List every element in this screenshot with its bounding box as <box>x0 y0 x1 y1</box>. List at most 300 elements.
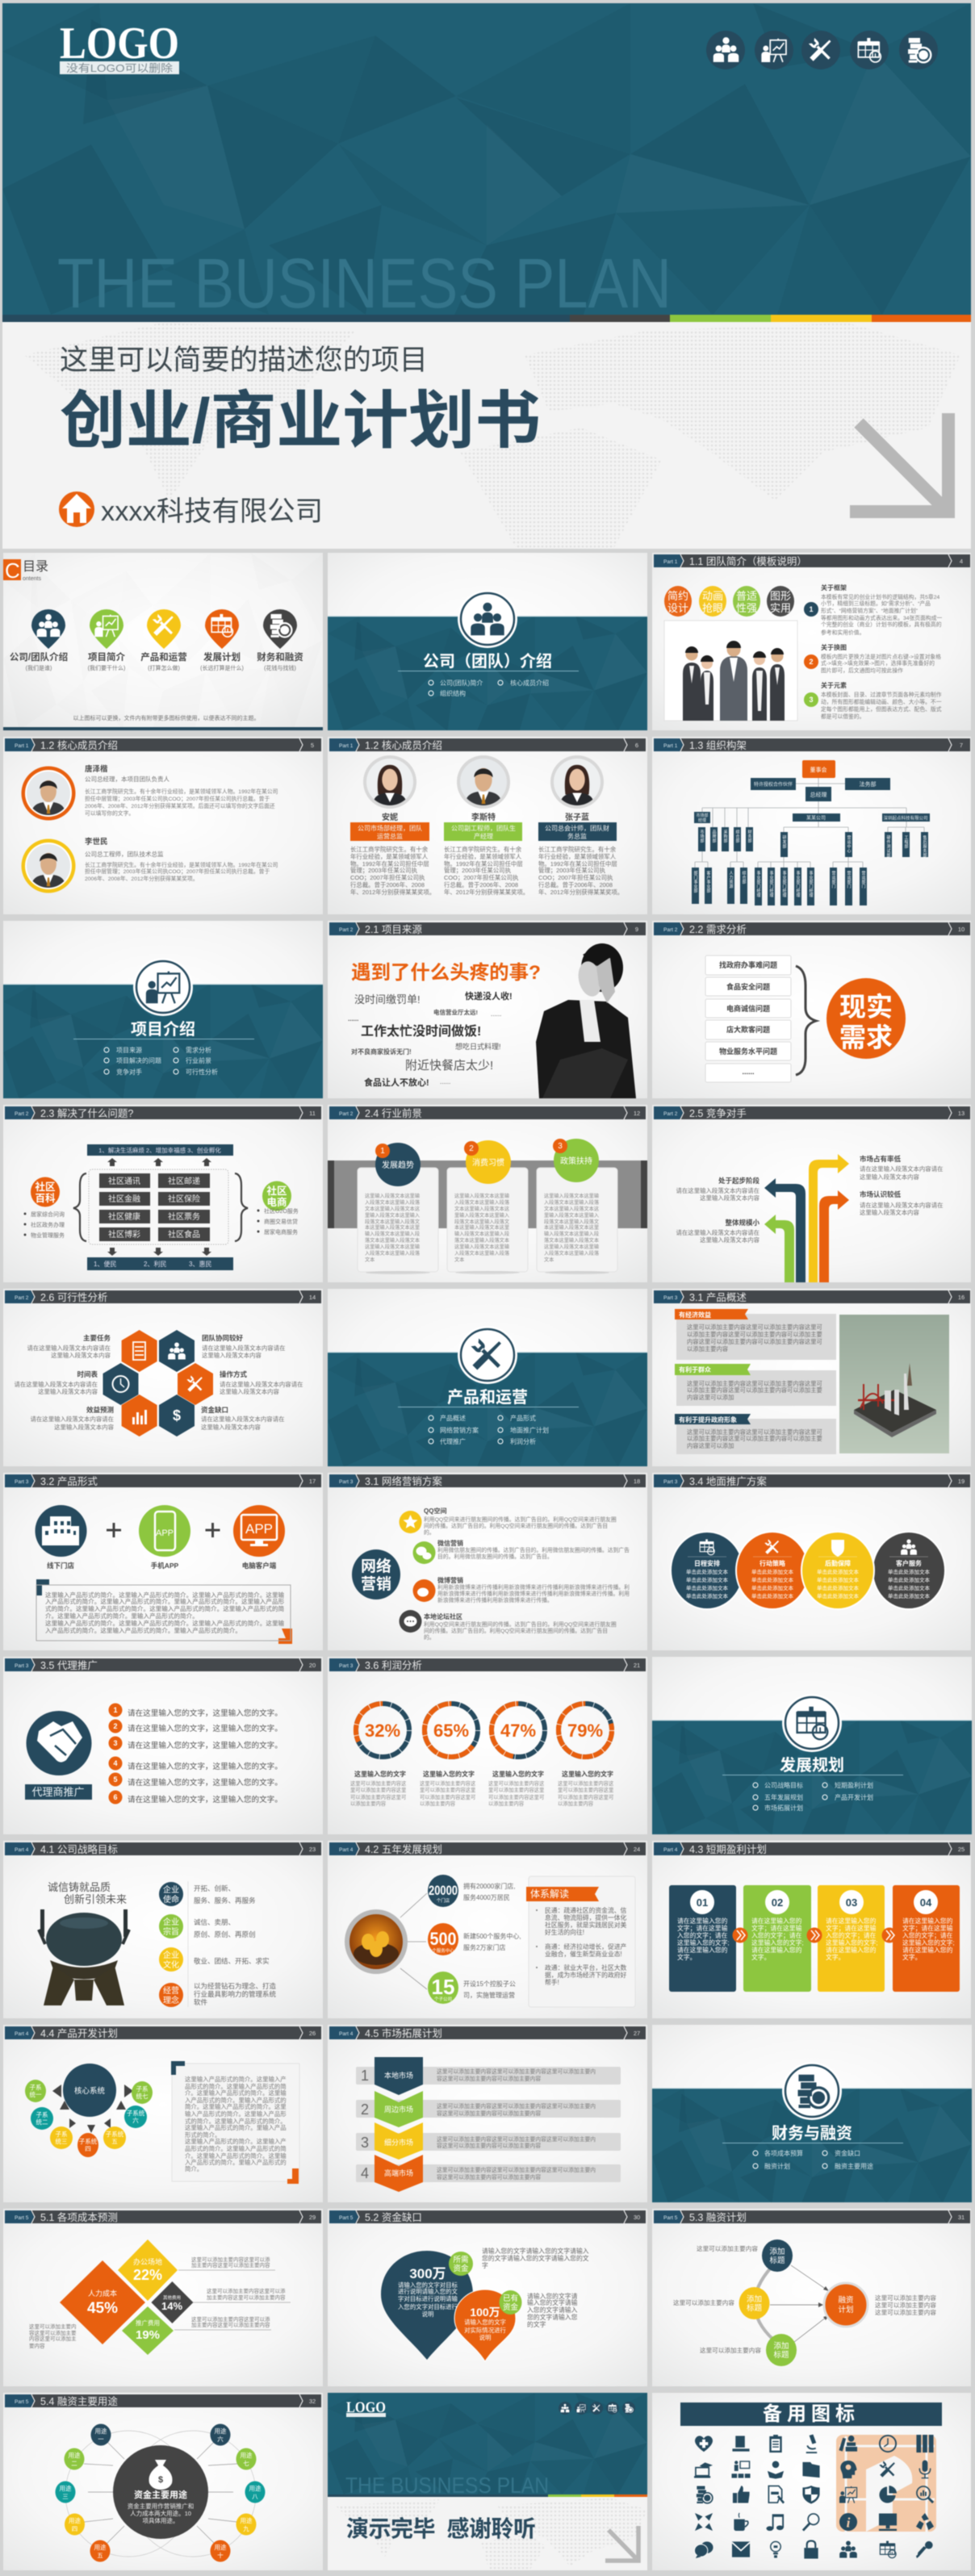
donut 32 percent <box>347 1695 418 1766</box>
icon: info: i <box>847 2515 851 2531</box>
slide header text: 6 <box>635 742 638 749</box>
donut 32 percent: 32% <box>365 1721 400 1741</box>
closing colour stripe <box>328 2494 647 2497</box>
feature pills: 动画 <box>702 590 723 602</box>
goal pills: 文化 <box>163 1959 179 1970</box>
channel text: 利用新浪微博来进行传播利用新浪微博来进行传播利用新浪微博来进行传播。利 <box>437 1583 630 1591</box>
icon: music note <box>766 2514 784 2531</box>
slide header text: 5.1 各项成本预测 <box>40 2211 118 2223</box>
connectors <box>400 1893 427 1989</box>
gap notes: 字 <box>482 2261 488 2269</box>
donut captions: 这里可以添加主要内容这 <box>488 1779 545 1787</box>
real demand circle: 现实 <box>839 992 893 1022</box>
member bios: 物。1992年在某公司担任中层 <box>350 860 429 868</box>
slide header text <box>663 555 963 567</box>
section title: 项目介绍 <box>131 1020 195 1039</box>
card texts <box>365 1193 600 1263</box>
plan nodes: 添加 <box>747 2295 762 2304</box>
contents item: project: 项目简介 <box>88 651 125 663</box>
numbered notes: 定每个图形都能用上，但图表达方式、配色、版式 <box>821 705 942 713</box>
channel text <box>424 1507 630 1641</box>
slide header text: 17 <box>309 1478 316 1485</box>
icon: info <box>839 2513 857 2531</box>
gap notes: 输入您的文字请输 <box>527 2298 578 2306</box>
slide header text: 16 <box>958 1294 965 1301</box>
channel text: QQ空间 <box>424 1507 446 1515</box>
chevron labels: 周边市场 <box>384 2105 413 2114</box>
panel: cost forecast <box>3 2209 323 2386</box>
slide header text <box>339 2211 640 2223</box>
org chart department labels <box>693 829 927 897</box>
thank-you message: 演示完毕 感谢聆听 <box>346 2516 536 2541</box>
card texts: 文本 <box>365 1257 375 1263</box>
channel text: 微信营销 <box>437 1539 463 1547</box>
feasibility labels left: 请在这里输入段落文本内容请在 <box>15 1381 98 1388</box>
cost labels: 45% <box>87 2300 118 2317</box>
system panel: 商通：经济拉动增长，促进产 <box>545 1942 627 1951</box>
member: text two: 2006年、2008年、2012年分别获得某某奖项。 <box>85 875 199 882</box>
card texts: 这里输入段落文本这里输 <box>544 1193 600 1199</box>
company name: xxxx科技有限公司 <box>101 496 323 527</box>
panel: five-year plan <box>328 1841 647 2018</box>
hub diagram: 统二 <box>36 2118 48 2126</box>
goal pills: 企业 <box>163 1917 179 1927</box>
complaint word cloud: 想吃日式料理! <box>455 1042 501 1051</box>
hub diagram: 子系统 <box>79 2137 98 2145</box>
section bullets: 项目解决的问题 <box>116 1056 161 1064</box>
form: mobile app: 手机APP <box>151 1562 179 1570</box>
feasibility labels right: 请在这里输入段落文本内容请在 <box>202 1344 285 1352</box>
chevron labels: 细分市场 <box>384 2138 413 2147</box>
promotion text: 单击此处添加文本 <box>817 1592 859 1600</box>
icon: key <box>916 2541 933 2558</box>
panel: feasibility <box>3 1289 323 1466</box>
outlook circles: 3 <box>558 1142 563 1151</box>
hub diagram: 子系统 <box>106 2130 124 2138</box>
description panel: 入产品形式的简介。里输入产品形式的 <box>185 2097 287 2104</box>
numbered notes: 2 <box>809 658 814 666</box>
card texts: 这里输入段落文本这里输 <box>365 1244 421 1250</box>
plan nodes <box>739 2239 868 2366</box>
promotion text: 行动策略 <box>759 1559 785 1567</box>
hub diagram: 子系 <box>29 2083 42 2091</box>
numbered list: 请在这里输入您的文字，这里输入您的文字。 <box>128 1741 282 1750</box>
icon: team <box>471 603 504 635</box>
panel: demand analysis <box>652 921 971 1098</box>
slide header text: 13 <box>958 1110 965 1117</box>
member names: 李斯特 <box>471 812 496 822</box>
product descriptions: 内容这里可以添加 <box>687 1442 734 1449</box>
market descriptions: 这里可以添加主要内容这里可以添加主要内容这里可以添加主要内 <box>437 2166 596 2173</box>
org chart department labels: 事业部门经理 <box>796 870 801 897</box>
panel: product forms <box>3 1473 323 1650</box>
section bullets: 各项成本预算 <box>764 2149 803 2157</box>
usage nodes: 一 <box>98 2436 104 2443</box>
slide header text: 3.1 网络营销方案 <box>365 1475 442 1487</box>
demand list: ...... <box>742 1068 755 1076</box>
column text: 请在这里输入您的 <box>902 1917 953 1925</box>
team photo <box>664 621 797 721</box>
member: text one: 担任中层管理；2003年任某公司执COO；2007年担任某公司执行总裁。曾于 <box>85 795 270 802</box>
donut captions <box>350 1770 614 1807</box>
slide header text: 20 <box>309 1662 316 1669</box>
feasibility labels right: 这里输入段落文本内容 <box>220 1388 280 1395</box>
section bullets: 项目来源 <box>116 1047 142 1054</box>
member roles <box>350 822 617 841</box>
contents item: finance: (花钱与找钱) <box>264 664 296 671</box>
icon: envelope <box>732 2541 750 2557</box>
usage nodes: 六 <box>217 2435 224 2443</box>
numbered list: 1 <box>113 1706 118 1714</box>
description panel: 这里输入产品形式的简介。里输入产品 <box>185 2124 287 2131</box>
channel text: 利用微信朋友圈间的传播。达到广告目的。利用微信朋友圈间的传播。达到广告 <box>437 1546 630 1554</box>
orange drop <box>454 2290 516 2361</box>
donut captions: 以添加主要内容 <box>350 1800 387 1807</box>
plus <box>107 1523 121 1537</box>
member: text two <box>85 837 278 882</box>
card texts: 输入段落文本这里输入段 <box>544 1231 599 1237</box>
slide header text: 5.4 融资主要用途 <box>40 2395 118 2407</box>
orange drop: 请输入您的文字 <box>464 2319 506 2326</box>
icon: clock <box>880 2436 896 2452</box>
plan nodes: 添加 <box>773 2342 789 2351</box>
slide header text: Part 5 <box>15 2215 29 2221</box>
complaint word cloud: ...... <box>491 1010 501 1018</box>
section bullets: 产品形式 <box>510 1414 536 1422</box>
market descriptions: 容这里可以添加主要内容可以添加主要内容 <box>437 2110 541 2117</box>
member bios: 物。1992年在某公司担任中层 <box>538 860 617 868</box>
icon: clipboard <box>769 2435 782 2453</box>
slide header text: 5.2 资金缺口 <box>365 2211 422 2223</box>
cost notes: 加主要内容这里可以添加主要内容 <box>207 2294 286 2301</box>
section bullets <box>429 679 549 697</box>
org chart department labels: 营运部门 <box>831 870 836 889</box>
left pill and list: 社区政务办理 <box>31 1221 65 1228</box>
central hub: 人力成本两大用途。10 <box>130 2509 191 2517</box>
market descriptions: 容这里可以添加主要内容可以添加主要内容 <box>437 2173 541 2181</box>
feasibility labels right: 资金缺口 <box>201 1406 228 1414</box>
down arrows <box>107 1248 211 1256</box>
slide header text: 1.3 组织构架 <box>689 739 747 751</box>
feasibility labels left: 这里输入段落文本内容 <box>38 1388 98 1395</box>
icon: house <box>59 491 94 527</box>
target circles: 个门店 <box>437 1897 450 1904</box>
cost notes: 这里可以添加主要内容这里可以添 <box>191 2315 270 2323</box>
donut captions: 这里输入您的文字 <box>423 1770 475 1778</box>
column text: 请在这里输入您的 <box>826 1917 877 1925</box>
photo: city on a tablet <box>839 1315 949 1453</box>
product ribbons: 有利于提升政府形象 <box>679 1416 737 1424</box>
donut captions: 以添加主要内容 <box>558 1800 594 1807</box>
panel: section project <box>3 921 323 1099</box>
service grid: 社区通讯 <box>108 1176 140 1186</box>
plan nodes: 添加 <box>769 2248 785 2256</box>
central hub: $ <box>158 2475 163 2485</box>
orbit lines <box>65 2431 256 2557</box>
system panel: 社区服务，就是实践居民对美 <box>545 1921 627 1929</box>
panel: online marketing <box>328 1473 647 1650</box>
panel: closing slide <box>328 2393 647 2570</box>
system panel: 民通：疏通社区的资金流、信 <box>545 1906 627 1914</box>
promotion text: 单击此处添加文本 <box>817 1576 859 1583</box>
feature pills: 简约 <box>667 590 688 602</box>
card texts: 文本这里输入段落文本这 <box>544 1206 599 1212</box>
donut captions: 里可以添加主要内容这里 <box>488 1786 544 1793</box>
cost notes: 这里可以添加主要内 <box>29 2323 76 2330</box>
icon: laptop <box>732 2436 750 2452</box>
usage nodes: 十 <box>217 2551 224 2559</box>
hub diagram: 统一 <box>29 2090 42 2098</box>
panel: section finance <box>652 2025 972 2203</box>
usage nodes: 二 <box>71 2460 77 2467</box>
slide header text: Part 3 <box>663 1295 678 1301</box>
numbered list: 2 <box>113 1722 118 1730</box>
central hub: 项具体用途。 <box>142 2516 179 2524</box>
feature pills: 抢眼 <box>702 602 723 614</box>
left pill and list: 居家综合问询 <box>31 1211 65 1218</box>
numbered list: 4 <box>113 1759 118 1767</box>
slide header text: 19 <box>958 1478 965 1485</box>
section bullets <box>429 1414 549 1445</box>
slide header text: Part 1 <box>339 743 354 749</box>
donut captions: 里可以添加主要内容这里 <box>558 1786 613 1793</box>
usage nodes: 用途 <box>215 2427 227 2435</box>
column text: 文字；请在这里输 <box>751 1924 802 1932</box>
slide header text: 11 <box>309 1110 316 1117</box>
contents item: plan <box>200 609 244 671</box>
cover lower panel with dotted world map <box>2 322 971 549</box>
promotion text: 单击此处添加文本 <box>817 1584 859 1591</box>
form: desktop client <box>233 1505 285 1570</box>
cost labels: 人力成本 <box>88 2289 117 2298</box>
hexagon ring <box>103 1330 213 1436</box>
card texts: 本这里输入段落文本这里 <box>365 1224 420 1231</box>
member bios: 物。1992年在某公司担任中层 <box>444 860 523 868</box>
slide header text: Part 4 <box>663 1847 678 1853</box>
section bullets: 组织结构 <box>440 689 466 697</box>
hub diagram: 核心系统 <box>74 2086 105 2096</box>
card texts: 这里输入段落文本这里输 <box>454 1244 510 1250</box>
icon: head <box>840 2461 857 2478</box>
icon: calendar <box>797 1707 827 1739</box>
cost labels: 22% <box>133 2267 162 2283</box>
panel: funding gap <box>328 2209 647 2386</box>
up arrows <box>107 1158 211 1166</box>
org chart top boxes: 特许授权合作伙伴 <box>754 781 793 788</box>
side braces <box>73 1173 248 1241</box>
agent label: 代理商推广 <box>31 1786 85 1798</box>
card texts: 入段落文本这里输入段落 <box>454 1199 510 1206</box>
icon: training <box>731 2461 751 2478</box>
form: offline store <box>36 1505 87 1570</box>
slide header text: 32 <box>309 2398 316 2405</box>
green badges <box>449 2252 521 2315</box>
brace <box>796 966 816 1075</box>
donut captions: 可以添加主要内容这里可 <box>488 1793 544 1800</box>
panel: core members B <box>328 737 647 914</box>
member: text two: 公司总工程师，团队技术总监 <box>85 850 164 858</box>
numbered notes: 3 <box>809 696 814 704</box>
panel: spare icons <box>652 2393 971 2570</box>
member: text one: 公司总经理，本项目团队负责人 <box>85 775 169 783</box>
section bullets: 行业前景 <box>186 1056 211 1064</box>
column text: 文字。 <box>677 1953 696 1961</box>
promotion text <box>686 1557 930 1600</box>
slide header text: Part 5 <box>663 2215 678 2221</box>
org chart department labels: 财务部 <box>747 829 752 843</box>
numbered notes: 1 <box>809 605 814 613</box>
usage nodes <box>55 2424 265 2561</box>
org chart top boxes: 董事会 <box>810 766 826 773</box>
product ribbons <box>675 1309 751 1424</box>
panel: section company <box>328 553 647 731</box>
promotion text: 单击此处添加文本 <box>817 1568 859 1575</box>
numbered notes: 关于换图 <box>821 643 847 651</box>
cost labels: 推广费用 <box>136 2319 160 2327</box>
promotion circles <box>671 1532 945 1609</box>
competitor notes <box>676 1155 943 1244</box>
product text panels <box>676 1314 836 1454</box>
member bios: 行总裁。曾于2006年、2008 <box>538 881 613 889</box>
member bios <box>350 846 623 896</box>
column text: 请在这里输入您的 <box>751 1946 802 1954</box>
slide header text: 2.6 可行性分析 <box>40 1292 107 1303</box>
step chevrons <box>733 1927 898 1943</box>
complaint word cloud: 电信营业厅太远! <box>433 1008 478 1016</box>
description panel: 简介。 <box>185 2165 203 2172</box>
slide header text <box>663 1292 965 1303</box>
donut captions: 以添加主要内容 <box>488 1800 525 1807</box>
member bios: COO；2007年担任某公司执 <box>350 874 425 881</box>
slide header text: 3.1 产品概述 <box>689 1292 747 1303</box>
slide header text: 12 <box>634 1110 640 1117</box>
description panel: 入产品形式的简介。里输入产品形式的 <box>185 2159 287 2166</box>
contents heading: ontents <box>23 576 41 582</box>
promotion icons <box>700 1539 917 1557</box>
feasibility labels right: 这里输入段落文本内容 <box>202 1352 262 1359</box>
panel: competitors <box>652 1105 971 1282</box>
slide header text: 4.4 产品开发计划 <box>40 2027 118 2039</box>
section bullets: 融资计划 <box>764 2162 790 2170</box>
panel: funding usage <box>3 2393 323 2570</box>
section title: 财务与融资 <box>772 2124 852 2143</box>
contents item: project <box>88 609 125 671</box>
plan notes: 这里可以添加主要内容 <box>697 2244 758 2252</box>
card texts: 这里输入段落文本这里输 <box>365 1193 421 1199</box>
feasibility labels right: 团队协同较好 <box>202 1334 244 1342</box>
form: offline store: 线下门店 <box>47 1562 74 1570</box>
plus <box>205 1523 220 1537</box>
section bullets: 网络营销方案 <box>440 1426 479 1434</box>
member bios: 管理；2003年任某公司执 <box>444 867 512 874</box>
product ribbons: 有经济效益 <box>679 1311 711 1319</box>
left pill and list: 百科 <box>35 1192 56 1204</box>
numbered notes: 动，所有图形都能编辑动画、颜色、大小等。不一 <box>821 698 942 705</box>
grey band <box>328 1160 647 1228</box>
column text: 文字；请在这里输 <box>826 1924 877 1932</box>
chevron labels <box>384 2071 413 2177</box>
member names: 安妮 <box>382 812 398 822</box>
headline: 遇到了什么头疼的事? <box>351 962 541 984</box>
org chart department labels: 部门事业部 <box>693 870 697 893</box>
goal pills <box>159 1882 183 2007</box>
icon: calendar <box>880 2540 896 2558</box>
slide header text: Part 2 <box>15 1111 29 1117</box>
member bios: COO；2007年担任某公司执 <box>444 874 519 881</box>
navy drop: 说明 <box>422 2310 433 2318</box>
card texts: 段落文本这里输入段落文 <box>454 1219 509 1225</box>
goal text: 诚信、卖朋、 <box>194 1918 235 1926</box>
description box: 这里输入产品形式的简介。这里输入产品形式的简介。这里输入产品形式的简介。这里输 <box>45 1591 285 1599</box>
top bar: 1、解决生活麻烦 2、增加幸福感 3、创业孵化 <box>98 1146 221 1154</box>
panel: market expansion <box>328 2025 647 2202</box>
panel: section product <box>328 1289 647 1467</box>
feasibility labels right: 请在这里输入段落文本内容请在 <box>201 1416 284 1423</box>
section bullets: 产品概述 <box>440 1414 466 1422</box>
org chart department labels: 营运部门 <box>860 870 865 889</box>
donut captions: 可以添加主要内容这里可 <box>420 1793 475 1800</box>
target text: 新建500个服务中心, <box>463 1932 521 1940</box>
outlook cards <box>358 1168 617 1272</box>
product ribbons: 有利于群众 <box>679 1365 711 1374</box>
description box: 这里输入产品形式的简介。这里输入产品形式的简介。这里输入产品形式的简介。这里输 <box>45 1619 285 1627</box>
description box: 入产品形式的简介。这里输入产品形式的简介。里输入产品形式的简介。这里输入产品形 <box>45 1597 285 1605</box>
usage nodes: 五 <box>97 2552 103 2559</box>
top bar <box>87 1144 233 1156</box>
promotion text: 单击此处添加文本 <box>686 1568 728 1575</box>
hub diagram: 六 <box>132 2116 139 2124</box>
bottom bar <box>87 1257 233 1270</box>
slide header text: Part 5 <box>15 2399 29 2405</box>
org chart department labels: 人力资源 <box>728 871 733 889</box>
closing icon row <box>559 2402 635 2415</box>
slide header text: 27 <box>634 2030 640 2037</box>
demand list: 找政府办事难问题 <box>719 960 777 969</box>
usage nodes: 四 <box>72 2525 77 2532</box>
target text: 司，实施管理运营 <box>463 1991 515 1999</box>
usage nodes: 用途 <box>95 2427 107 2435</box>
section bullets: 公司战略目标 <box>764 1781 803 1789</box>
column text: 这里输入您的文字; <box>826 1938 878 1947</box>
competitor notes: 请在这里输入段落文本内容请在 <box>860 1202 943 1209</box>
plan nodes: 标题 <box>747 2303 762 2313</box>
member bios: 长江工商学院研究生。有十余 <box>350 846 429 853</box>
member bios: 年、2012年分别获得某某奖项。 <box>538 889 623 896</box>
slide header text <box>15 1843 316 1855</box>
donut captions: 里可以添加主要内容这里 <box>420 1786 475 1793</box>
org chart top boxes: 法务部 <box>859 780 877 788</box>
donut captions: 以添加主要内容 <box>420 1800 456 1807</box>
marketing hub circle: 网络 <box>361 1557 391 1575</box>
member: text one: 2006年、2008年、2012年分别获得某某奖项。后面还可以填写你的文字后面还 <box>85 802 275 809</box>
plan nodes: 标题 <box>769 2256 785 2265</box>
card texts: 文本这里输入段落文本这 <box>365 1206 420 1212</box>
icon: light bulb <box>771 2541 780 2558</box>
step numbers: 01 <box>697 1896 708 1909</box>
motto: 创新引领未来 <box>64 1893 127 1905</box>
feature pills: 普适 <box>736 590 757 602</box>
slide header text: Part 1 <box>663 743 678 749</box>
icon: document <box>768 2486 785 2504</box>
slide header text: Part 4 <box>339 2031 354 2037</box>
goal text: 以为经营钻石为理念、打造 <box>194 1982 277 1990</box>
cost labels: 其他费用 <box>163 2294 181 2301</box>
org chart department labels: 市场部 <box>699 829 704 843</box>
slide header text: 9 <box>635 926 638 933</box>
donut captions: 可以添加主要内容这里可 <box>350 1793 406 1800</box>
promotion text: 单击此处添加文本 <box>686 1592 728 1600</box>
target circles: 个服务中心 <box>432 1947 454 1954</box>
